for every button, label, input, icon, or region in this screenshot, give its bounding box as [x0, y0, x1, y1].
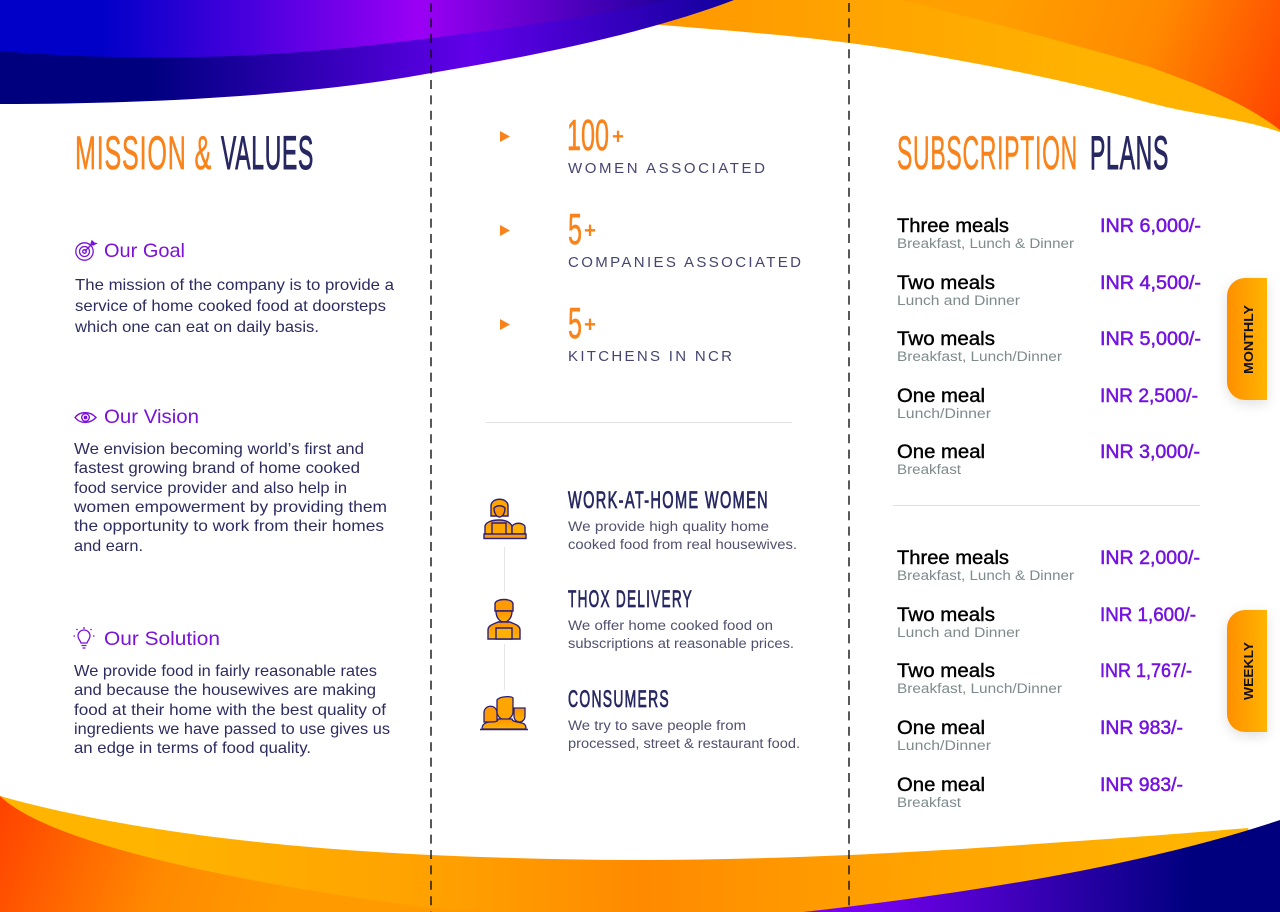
- tab: weekly: WEEKLY: [1241, 642, 1256, 700]
- plan: three meals weekly: [897, 547, 1200, 584]
- icon: target: [76, 241, 96, 260]
- text: PLANS: [1090, 126, 1169, 179]
- block: our solution: We provide food in fairly reasonable rates: [74, 663, 377, 680]
- plan: one meal lunch monthly: Lunch/Dinner: [897, 406, 991, 422]
- block: our vision: women empowerment by providing them: [73, 499, 387, 516]
- plan: three meals monthly: INR 6,000/-: [1100, 215, 1201, 237]
- plan: one meal breakfast weekly: [897, 774, 1183, 811]
- plan: one meal breakfast monthly: [897, 441, 1200, 478]
- plan: two meals breakfast monthly: INR 5,000/-: [1100, 328, 1201, 350]
- block: our goal: Our Goal: [104, 240, 185, 262]
- icon: arrow marker: [500, 319, 510, 330]
- block: our goal: which one can eat on daily basis.: [74, 319, 319, 336]
- stat: kitchens in ncr: 5: [568, 299, 582, 348]
- stat: women associated: 100: [567, 111, 609, 160]
- weekly plans list: [897, 547, 1200, 811]
- block: our vision: Our Vision: [104, 406, 199, 428]
- icon: woman cooking: [484, 499, 526, 538]
- plan: two meals breakfast weekly: Breakfast, Lunch/Dinner: [897, 681, 1062, 697]
- plan: three meals weekly: Breakfast, Lunch & Dinner: [897, 568, 1074, 584]
- plan: two meals lunch and dinner monthly: Lunch and Dinner: [897, 293, 1020, 309]
- plan: two meals breakfast weekly: Two meals: [897, 660, 995, 682]
- heading: mission and values: MISSION &: [75, 126, 212, 179]
- stat: kitchens in ncr: +: [584, 312, 596, 337]
- item: consumers: CONSUMERS: [568, 686, 670, 713]
- tab: monthly: MONTHLY: [1241, 305, 1256, 374]
- heading: subscription plans: SUBSCRIPTION: [897, 126, 1078, 179]
- block: our goal: service of home cooked food at doorsteps: [75, 298, 386, 315]
- plan: one meal breakfast monthly: One meal: [897, 441, 985, 463]
- plan: three meals monthly: Breakfast, Lunch & Dinner: [897, 236, 1074, 252]
- plan: one meal lunch weekly: [897, 717, 1183, 754]
- text: VALUES: [221, 126, 314, 179]
- tab: monthly: [1227, 278, 1267, 400]
- item: thox delivery: [488, 586, 794, 652]
- plan: two meals breakfast monthly: [897, 328, 1201, 365]
- stat: kitchens in ncr: [500, 299, 732, 365]
- plan: one meal breakfast monthly: INR 3,000/-: [1100, 441, 1200, 463]
- block: our solution: Our Solution: [104, 628, 220, 650]
- block: our vision: and earn.: [74, 538, 143, 555]
- stat: women associated: [500, 111, 765, 177]
- plan: one meal lunch weekly: One meal: [897, 717, 985, 739]
- block: our goal: [74, 240, 394, 336]
- item: thox delivery: subscriptions at reasonable prices.: [568, 636, 794, 652]
- plan: two meals lunch and dinner weekly: Lunch and Dinner: [897, 625, 1020, 641]
- item: work-at-home women: We provide high quality home: [568, 519, 769, 535]
- plan: one meal breakfast weekly: Breakfast: [897, 795, 961, 811]
- block: our solution: and because the housewives are making: [74, 682, 376, 699]
- plan: one meal lunch weekly: Lunch/Dinner: [897, 738, 991, 754]
- stat: kitchens in ncr: KITCHENS IN NCR: [568, 348, 732, 365]
- fold lines: [431, 3, 849, 912]
- item: work-at-home women: [484, 487, 797, 553]
- icon: arrow marker: [500, 131, 510, 142]
- item: work-at-home women: cooked food from real housewives.: [568, 537, 797, 553]
- icon: eye: [75, 413, 96, 422]
- monthly plans list: [897, 215, 1201, 478]
- block: our goal: The mission of the company is to provide a: [75, 277, 394, 294]
- item: consumers: [480, 686, 800, 752]
- plan: two meals breakfast monthly: Breakfast, Lunch/Dinner: [897, 349, 1062, 365]
- icon: light bulb: [74, 627, 94, 648]
- item: consumers: We try to save people from: [568, 718, 746, 734]
- plan: one meal lunch monthly: [897, 385, 1198, 422]
- stat: companies associated: COMPANIES ASSOCIATED: [568, 254, 801, 271]
- plan: two meals lunch and dinner monthly: Two meals: [897, 272, 995, 294]
- plan: three meals monthly: [897, 215, 1201, 252]
- block: our vision: We envision becoming world’s first and: [74, 441, 364, 458]
- top right orange wave: [650, 0, 1280, 132]
- plan: one meal breakfast monthly: Breakfast: [897, 462, 961, 478]
- block: our vision: food service provider and also help in: [74, 480, 347, 497]
- plan: one meal lunch weekly: INR 983/-: [1100, 717, 1183, 739]
- bottom orange wave: [0, 796, 1280, 912]
- stat: women associated: +: [612, 124, 624, 149]
- stat: companies associated: 5: [568, 205, 582, 254]
- plan: two meals breakfast weekly: [897, 660, 1192, 697]
- item: thox delivery: We offer home cooked food on: [568, 618, 773, 634]
- plan: three meals weekly: Three meals: [897, 547, 1009, 569]
- stat: women associated: WOMEN ASSOCIATED: [568, 160, 765, 177]
- plan: three meals monthly: Three meals: [897, 215, 1009, 237]
- tab: weekly: [1227, 610, 1267, 732]
- plan: two meals lunch and dinner monthly: [897, 272, 1201, 309]
- top left purple wave: [0, 0, 734, 104]
- plan: two meals lunch and dinner weekly: [897, 604, 1196, 641]
- plan: one meal lunch monthly: INR 2,500/-: [1100, 385, 1198, 407]
- stat: companies associated: [500, 205, 801, 271]
- block: our solution: food at their home with the best quality of: [74, 702, 387, 719]
- item: work-at-home women: WORK-AT-HOME WOMEN: [568, 487, 769, 514]
- block: our vision: fastest growing brand of home cooked: [74, 460, 360, 477]
- plan: one meal breakfast weekly: INR 983/-: [1100, 774, 1183, 796]
- plan: two meals lunch and dinner weekly: Two meals: [897, 604, 995, 626]
- icon: arrow marker: [500, 225, 510, 236]
- stat: companies associated: +: [584, 218, 596, 243]
- plan: two meals lunch and dinner monthly: INR 4,500/-: [1100, 272, 1201, 294]
- icon: family: [480, 697, 528, 730]
- plan: one meal breakfast weekly: One meal: [897, 774, 985, 796]
- plan: two meals lunch and dinner weekly: INR 1,600/-: [1100, 604, 1196, 626]
- icon: delivery man: [488, 600, 520, 639]
- block: our solution: an edge in terms of food quality.: [74, 740, 311, 757]
- item: thox delivery: THOX DELIVERY: [568, 586, 693, 613]
- block: our vision: the opportunity to work from their homes: [74, 518, 384, 535]
- plan: two meals breakfast weekly: INR 1,767/-: [1100, 660, 1192, 682]
- plan: one meal lunch monthly: One meal: [897, 385, 985, 407]
- plan: two meals breakfast monthly: Two meals: [897, 328, 995, 350]
- block: our solution: [74, 627, 390, 757]
- block: our vision: [73, 406, 387, 555]
- plan: three meals weekly: INR 2,000/-: [1100, 547, 1200, 569]
- block: our solution: ingredients we have passed to use gives us: [74, 721, 390, 738]
- bottom right purple wave: [803, 820, 1280, 912]
- item: consumers: processed, street & restaurant food.: [568, 736, 800, 752]
